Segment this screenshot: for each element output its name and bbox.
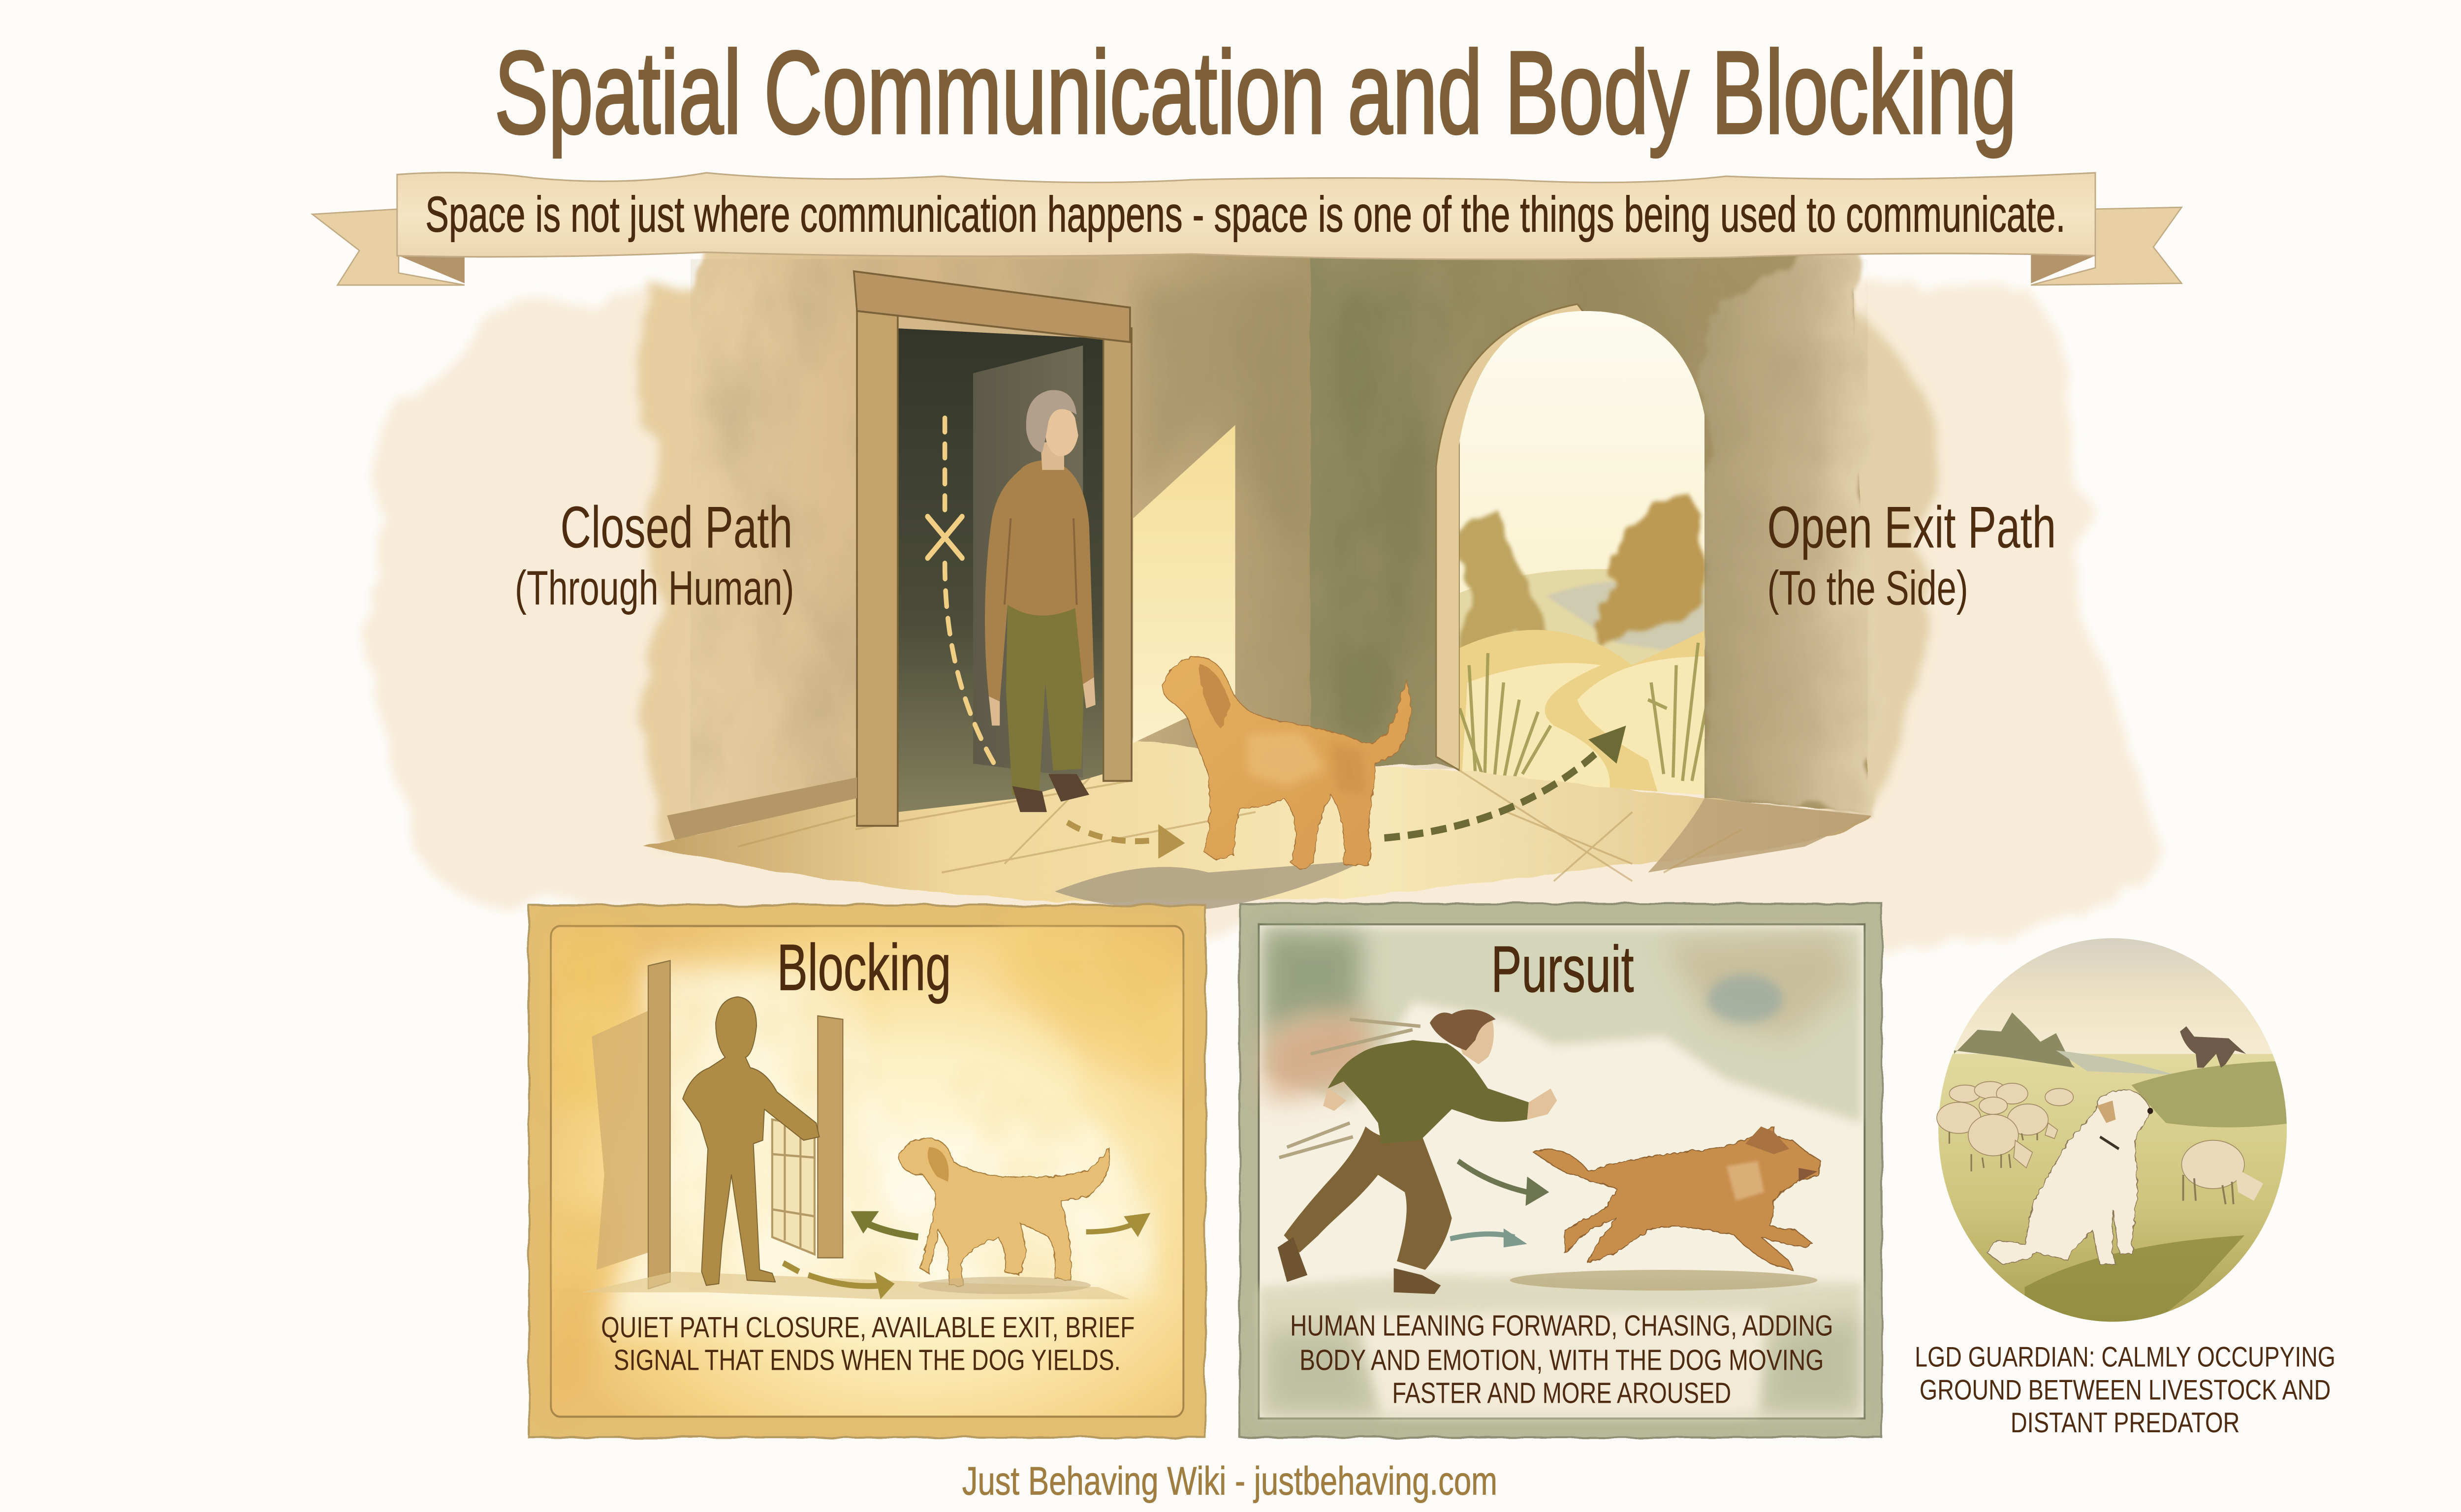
baseboard bbox=[667, 778, 857, 840]
wolf silhouette bbox=[2180, 1026, 2246, 1068]
sweater bbox=[985, 460, 1094, 701]
floor boards bbox=[643, 739, 1871, 902]
pursuit arrow: dark bbox=[1458, 1161, 1549, 1206]
panel: blocking bbox=[529, 905, 1205, 1438]
pursuit bottom wash bbox=[1259, 1275, 1862, 1418]
pursuit motion streaks bbox=[1279, 1019, 1420, 1158]
sheep flock bbox=[1937, 1081, 2073, 1171]
watercolor wash behind scene bbox=[365, 277, 2166, 946]
pursuit sky washes bbox=[1263, 928, 1862, 1123]
landscape through arch bbox=[1460, 311, 1704, 795]
blocking door posts bbox=[648, 961, 843, 1289]
white guardian dog bbox=[1987, 1090, 2153, 1265]
ribbon right tail bbox=[2031, 207, 2181, 285]
pursuit running dog bbox=[1533, 1127, 1821, 1270]
trousers bbox=[1006, 596, 1084, 798]
hair bbox=[1026, 390, 1077, 453]
blocking sunlit patches bbox=[597, 968, 1154, 1330]
pursuit shadow bbox=[1510, 1270, 1818, 1291]
lone sheep bbox=[2181, 1140, 2263, 1204]
LGD caption: LGD GUARDIAN: CALMLY OCCUPYING bbox=[1915, 1341, 2335, 1373]
label: open exit path bbox=[1767, 495, 2056, 615]
hands bbox=[1323, 1088, 1557, 1120]
blocking heading: Blocking bbox=[777, 931, 951, 1005]
pursuit running human bbox=[1278, 1009, 1557, 1294]
pursuit caption: HUMAN LEANING FORWARD, CHASING, ADDING bbox=[1290, 1309, 1833, 1342]
title: Spatial Communication and Body Blocking bbox=[494, 28, 2017, 158]
pursuit arrow: teal bbox=[1450, 1228, 1527, 1247]
footer credit: Just Behaving Wiki - justbehaving.com bbox=[962, 1459, 1497, 1503]
ribbon left tail bbox=[313, 209, 465, 285]
ribbon fold shadows bbox=[399, 252, 2095, 284]
open door leaf bbox=[973, 346, 1083, 778]
LGD caption: DISTANT PREDATOR bbox=[2011, 1407, 2240, 1439]
watercolor mottling on walls bbox=[691, 259, 1867, 798]
blocking caption: QUIET PATH CLOSURE, AVAILABLE EXIT, BRIEF bbox=[601, 1311, 1135, 1344]
blocking caption: SIGNAL THAT ENDS WHEN THE DOG YIELDS. bbox=[614, 1344, 1121, 1377]
blocking shadow under dog bbox=[918, 1277, 1091, 1294]
pursuit heading: Pursuit bbox=[1491, 933, 1634, 1006]
blocking left wall bbox=[592, 1010, 648, 1270]
blocking caption bbox=[601, 1311, 1135, 1377]
pursuit frame bbox=[1240, 904, 1882, 1438]
legs bbox=[1284, 1127, 1452, 1270]
archway reveal bbox=[1436, 304, 1585, 771]
neck and face bbox=[1041, 442, 1064, 470]
blocking arrow: right exit bbox=[1086, 1213, 1150, 1237]
blocking gate bbox=[772, 1120, 815, 1254]
label: open exit path: Open Exit Path bbox=[1767, 495, 2056, 561]
door frame bbox=[854, 271, 1132, 826]
open exit dashed arrow bbox=[1384, 725, 1626, 838]
dog shadow bbox=[1055, 860, 1365, 909]
face bbox=[1456, 1015, 1494, 1064]
scene: doorway and archway room bbox=[643, 233, 1884, 909]
doorway dark interior bbox=[896, 328, 1104, 812]
blocking arrow: lower bbox=[783, 1263, 895, 1299]
shoes bbox=[1278, 1237, 1441, 1294]
blocking mottling bbox=[551, 926, 1183, 1289]
hands bbox=[989, 677, 1096, 725]
hair and bun bbox=[1430, 1009, 1496, 1050]
label: closed path bbox=[515, 495, 794, 615]
blocking human silhouette bbox=[683, 997, 820, 1286]
golden retriever bbox=[1163, 657, 1411, 869]
right wall section bbox=[1704, 233, 1880, 812]
ribbon body bbox=[397, 173, 2095, 259]
blocked path dashes and X bbox=[928, 418, 998, 771]
label: closed path: Closed Path bbox=[560, 495, 792, 561]
LGD caption bbox=[1915, 1341, 2335, 1439]
vignette: LGD guardian bbox=[1915, 933, 2335, 1439]
panel: pursuit bbox=[1240, 904, 1882, 1438]
pursuit caption: BODY AND EMOTION, WITH THE DOG MOVING bbox=[1299, 1344, 1824, 1377]
blocking arrow: back to door bbox=[851, 1211, 918, 1237]
pursuit inner paper bbox=[1259, 924, 1864, 1418]
vignette scene bbox=[1930, 933, 2295, 1339]
LGD caption: GROUND BETWEEN LIVESTOCK AND bbox=[1920, 1374, 2331, 1406]
darker stain by door bbox=[1138, 277, 1303, 570]
blocking inner wash bbox=[551, 926, 1183, 1417]
blocking floor bbox=[581, 1272, 1130, 1299]
blocking frame bbox=[529, 905, 1205, 1438]
blocking golden dog bbox=[899, 1138, 1110, 1286]
ribbon banner bbox=[313, 173, 2181, 285]
arrow to dog bbox=[1067, 822, 1185, 859]
label: open exit path: (To the Side) bbox=[1767, 561, 1968, 615]
pursuit caption: FASTER AND MORE AROUSED bbox=[1392, 1377, 1731, 1410]
torso and arms bbox=[1328, 1040, 1529, 1144]
wall between corner and arch bbox=[1311, 233, 1868, 812]
pursuit caption bbox=[1290, 1309, 1833, 1410]
wall left of corner bbox=[681, 233, 1334, 826]
green mottling on wall bbox=[1334, 294, 1444, 743]
label: closed path: (Through Human) bbox=[515, 561, 794, 615]
human in doorway bbox=[985, 390, 1096, 812]
sunlight patch on wall bbox=[1133, 425, 1235, 743]
sleeve shade bbox=[1005, 518, 1077, 605]
